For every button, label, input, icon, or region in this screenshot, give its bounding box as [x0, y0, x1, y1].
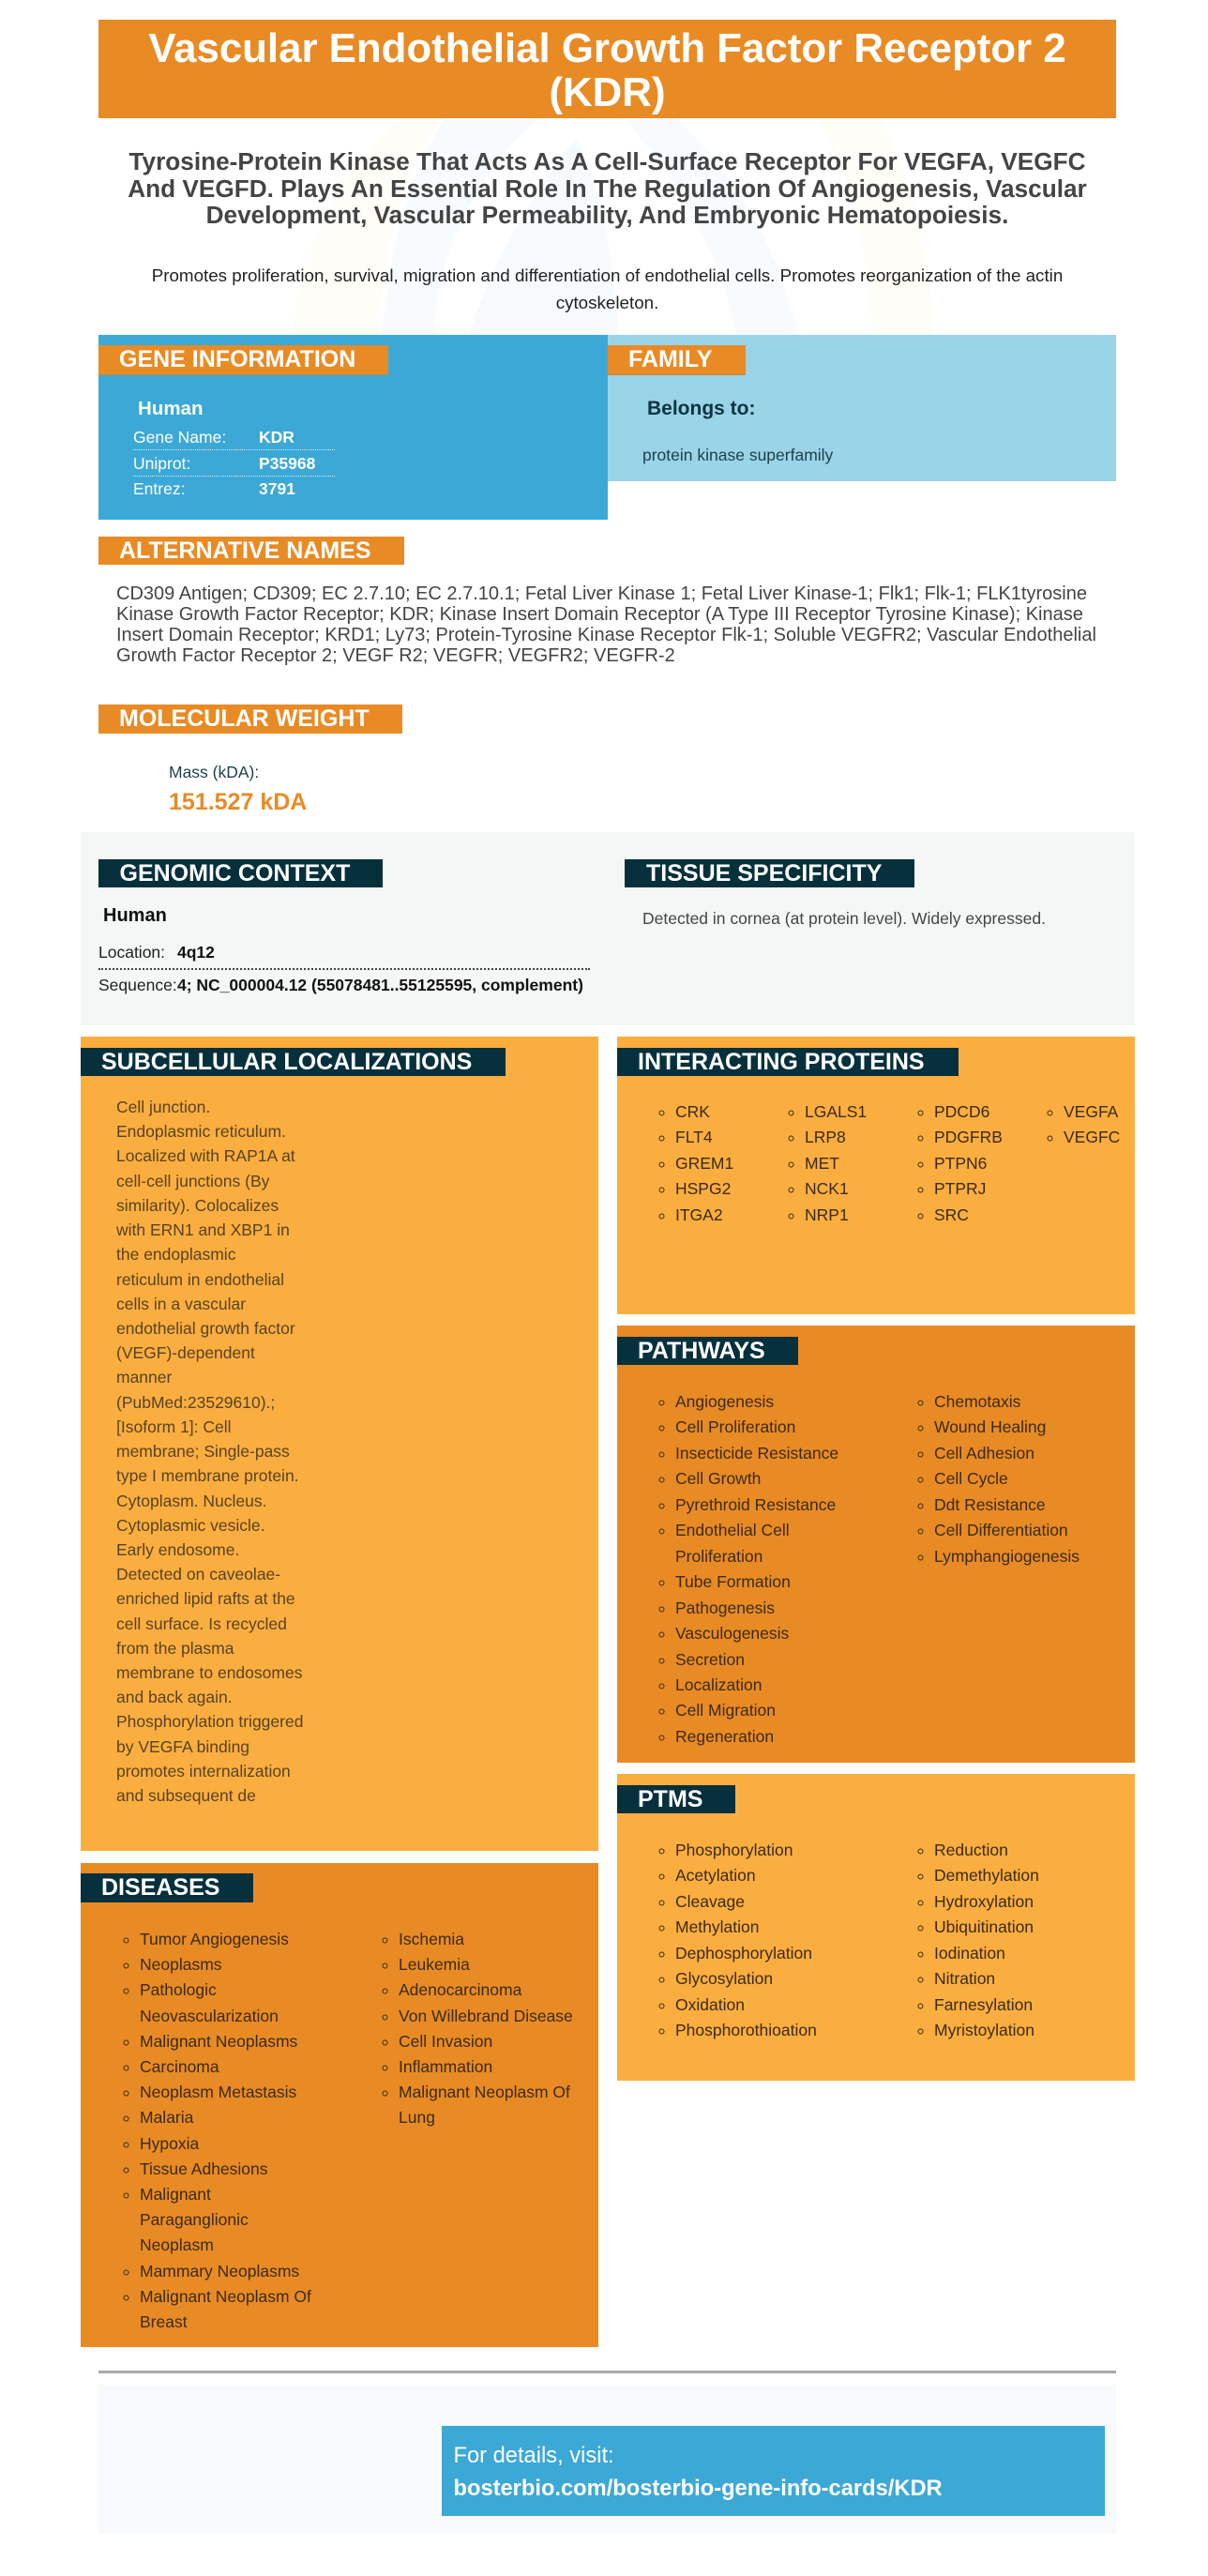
pathway list column 1: Regeneration	[675, 1727, 774, 1746]
pathway list column 1: Tube Formation	[675, 1572, 791, 1591]
pathway list column 1: Secretion	[675, 1650, 745, 1669]
tissue specificity text: Detected in cornea (at protein level). Widely expressed.	[642, 909, 1046, 928]
disease list column 2: Leukemia	[399, 1955, 470, 1974]
title	[98, 20, 1116, 118]
disease list column 1	[124, 1930, 311, 2331]
disease list column 1: Malaria	[140, 2108, 193, 2127]
description	[152, 265, 1063, 312]
pathway list column 1	[658, 1392, 838, 1746]
localization text: reticulum in endothelial	[116, 1270, 284, 1289]
localization text: Cytoplasm. Nucleus.	[116, 1492, 266, 1510]
pathway list column 1: Localization	[675, 1675, 762, 1694]
panel: ptms	[617, 1774, 1135, 2081]
pathway list column 1: Angiogenesis	[675, 1392, 774, 1411]
pathway list column 2	[917, 1392, 1080, 1566]
pathway list column 2: Ddt Resistance	[934, 1495, 1046, 1514]
localization text: Cell junction.	[116, 1098, 210, 1116]
pathway list column 1: Cell Growth	[675, 1469, 761, 1488]
protein list column 3	[917, 1102, 1003, 1224]
localization text: Endoplasmic reticulum.	[116, 1122, 286, 1141]
description: cytoskeleton.	[556, 293, 658, 312]
disease list column 2: Cell Invasion	[399, 2032, 492, 2051]
disease list column 1: Carcinoma	[140, 2057, 219, 2076]
ptm list column 2: Myristoylation	[934, 2021, 1034, 2039]
callout: details link	[442, 2426, 1105, 2516]
disease list column 2: Adenocarcinoma	[399, 1980, 521, 1999]
ptm list column 1: Phosphorothioation	[675, 2021, 817, 2039]
location row: 4q12	[177, 943, 215, 962]
title: (KDR)	[549, 69, 666, 115]
panel: diseases	[81, 1863, 598, 2347]
subtitle: Tyrosine-Protein Kinase That Acts As A Cell-Surface Receptor For VEGFA, VEGFC	[128, 147, 1086, 175]
localization text: manner	[116, 1368, 172, 1386]
localization text: membrane to endosomes	[116, 1663, 302, 1682]
ptm list column 1: Oxidation	[675, 1995, 745, 2014]
localization text: Detected on caveolae-	[116, 1565, 280, 1583]
species label: Human	[103, 905, 167, 926]
ptm list column 2: Hydroxylation	[934, 1892, 1034, 1911]
localization text: Phosphorylation triggered	[116, 1712, 303, 1731]
pathway list column 1: Insecticide Resistance	[675, 1444, 838, 1462]
protein list column 3: SRC	[934, 1205, 969, 1224]
panel: pathways	[617, 1326, 1135, 1763]
localization text: from the plasma	[116, 1639, 234, 1658]
sequence row: Sequence:	[98, 976, 177, 994]
protein list column 2: LGALS1	[805, 1102, 867, 1121]
protein list column 1: FLT4	[675, 1128, 713, 1146]
protein list column 1: CRK	[675, 1102, 710, 1121]
localization text: cells in a vascular	[116, 1295, 246, 1313]
location row: Location:	[98, 943, 165, 962]
localization text: similarity). Colocalizes	[116, 1196, 279, 1215]
pathway list column 2: Lymphangiogenesis	[934, 1547, 1080, 1566]
subtitle: And VEGFD. Plays An Essential Role In The Regulation Of Angiogenesis, Vascular	[128, 174, 1087, 203]
ptm list column 2: Farnesylation	[934, 1995, 1033, 2014]
subtitle	[128, 147, 1087, 229]
localization text: and back again.	[116, 1688, 233, 1706]
disease list column 1: Tissue Adhesions	[140, 2159, 268, 2178]
localization text: Localized with RAP1A at	[116, 1146, 295, 1165]
callout label: For details, visit:	[454, 2444, 614, 2468]
protein list column 4: VEGFA	[1064, 1102, 1118, 1121]
ptm list column 1: Glycosylation	[675, 1969, 773, 1988]
heading: diseases: DISEASES	[101, 1874, 219, 1901]
gene name row: KDR	[259, 428, 294, 447]
localization text: the endoplasmic	[116, 1245, 235, 1264]
localization text: Cytoplasmic vesicle.	[116, 1516, 265, 1535]
panel: gene information	[98, 335, 608, 520]
protein list column 4: VEGFC	[1064, 1128, 1120, 1146]
heading: family	[608, 345, 746, 374]
heading: alternative names: ALTERNATIVE NAMES	[119, 538, 371, 564]
subtitle: Development, Vascular Permeability, And Embryonic Hematopoiesis.	[206, 201, 1008, 229]
protein list column 2: LRP8	[805, 1128, 846, 1146]
ptm list column 1	[658, 1841, 817, 2039]
protein list column 4	[1047, 1102, 1120, 1146]
heading: ptms: PTMS	[638, 1786, 702, 1812]
callout url: bosterbio.com/bosterbio-gene-info-cards/KDR	[454, 2477, 943, 2501]
disease list column 1: Malignant Neoplasms	[140, 2032, 297, 2051]
panel: genomic context and tissue specificity	[81, 832, 1135, 1025]
belongs to label: Belongs to:	[647, 398, 756, 419]
species label: Human	[138, 398, 203, 419]
pathway list column 1: Cell Proliferation	[675, 1417, 795, 1436]
localization text: type I membrane protein.	[116, 1466, 299, 1485]
pathway list column 2: Cell Differentiation	[934, 1521, 1068, 1539]
heading: molecular weight: MOLECULAR WEIGHT	[119, 705, 370, 732]
mass value: 151.527 kDA	[169, 789, 307, 815]
localization text: (VEGF)-dependent	[116, 1343, 255, 1362]
heading: pathways	[617, 1337, 798, 1365]
ptm list column 1: Methylation	[675, 1917, 760, 1936]
heading: family: FAMILY	[628, 346, 712, 372]
disease list column 1: Neoplasm Metastasis	[140, 2083, 296, 2101]
disease list column 1: Pathologic Neovascularization	[140, 1980, 279, 2025]
disease list column 1: Mammary Neoplasms	[140, 2262, 299, 2281]
alternative names text: CD309 Antigen; CD309; EC 2.7.10; EC 2.7.10.1; Fetal Liver Kinase 1; Fetal Liver Kinase-1; Flk1; Flk-1; FLK1tyrosine	[116, 583, 1087, 604]
protein list column 2: NCK1	[805, 1179, 849, 1198]
alternative names text: Kinase Growth Factor Receptor; KDR; Kinase Insert Domain Receptor (A Type III Receptor Tyrosine Kinase); Kinase	[116, 604, 1083, 625]
disease list column 2: Von Willebrand Disease	[399, 2007, 573, 2025]
pathway list column 2: Wound Healing	[934, 1417, 1046, 1436]
localization text: with ERN1 and XBP1 in	[116, 1220, 290, 1239]
family text: protein kinase superfamily	[642, 446, 833, 464]
disease list column 1: Malignant Paraganglionic Neoplasm	[140, 2185, 249, 2254]
title: Vascular Endothelial Growth Factor Receptor 2	[148, 25, 1066, 71]
ptm list column 2: Demethylation	[934, 1866, 1039, 1885]
localization text: cell surface. Is recycled	[116, 1614, 287, 1633]
pathway list column 1: Vasculogenesis	[675, 1624, 789, 1643]
gene name row: Gene Name:	[133, 428, 226, 447]
disease list column 2: Malignant Neoplasm Of Lung	[399, 2083, 570, 2127]
heading: subcellular localizations: SUBCELLULAR LOCALIZATIONS	[101, 1049, 472, 1075]
localization text: [Isoform 1]: Cell	[116, 1417, 232, 1436]
footer panel	[98, 2385, 1116, 2534]
ptm list column 1: Acetylation	[675, 1866, 756, 1885]
ptm list column 2: Ubiquitination	[934, 1917, 1034, 1936]
heading: ptms	[617, 1785, 735, 1813]
protein list column 1: HSPG2	[675, 1179, 731, 1198]
alternative names text: Insert Domain Receptor; KRD1; Ly73; Protein-Tyrosine Kinase Receptor Flk-1; Soluble VEGFR2; Vascular Endothelial	[116, 625, 1096, 645]
ptm list column 2	[917, 1841, 1039, 2039]
ptm list column 1: Cleavage	[675, 1892, 745, 1911]
pathway list column 1: Endothelial Cell Proliferation	[675, 1521, 790, 1566]
pathway list column 1: Cell Migration	[675, 1701, 776, 1720]
alternative names text: Growth Factor Receptor 2; VEGF R2; VEGFR; VEGFR2; VEGFR-2	[116, 645, 675, 666]
localization text: and subsequent de	[116, 1786, 256, 1805]
localization text: endothelial growth factor	[116, 1319, 295, 1338]
protein list column 3: PTPRJ	[934, 1179, 986, 1198]
heading: interacting proteins: INTERACTING PROTEINS	[638, 1049, 925, 1075]
disease list column 1: Malignant Neoplasm Of Breast	[140, 2287, 311, 2331]
ptm list column 2: Reduction	[934, 1841, 1008, 1859]
localization text: cell-cell junctions (By	[116, 1172, 269, 1190]
localization text: membrane; Single-pass	[116, 1442, 290, 1461]
panel: interacting proteins	[617, 1037, 1135, 1314]
localization text: enriched lipid rafts at the	[116, 1589, 295, 1608]
localization text: promotes internalization	[116, 1762, 291, 1780]
pathway list column 2: Cell Adhesion	[934, 1444, 1034, 1462]
disease list column 1: Neoplasms	[140, 1955, 222, 1974]
alternative names text	[116, 583, 1096, 666]
background watermark logo	[469, 139, 619, 335]
pathway list column 2: Cell Cycle	[934, 1469, 1008, 1488]
entrez row: Entrez:	[133, 479, 185, 498]
pathway list column 2: Chemotaxis	[934, 1392, 1020, 1411]
panel: subcellular localizations	[81, 1037, 598, 1851]
protein list column 1: ITGA2	[675, 1205, 723, 1224]
pathway list column 1: Pathogenesis	[675, 1599, 775, 1617]
ptm list column 2: Iodination	[934, 1944, 1005, 1962]
entrez row	[133, 479, 295, 498]
protein list column 2	[788, 1102, 867, 1224]
ptm list column 1: Dephosphorylation	[675, 1944, 812, 1962]
ptm list column 1: Phosphorylation	[675, 1841, 793, 1859]
uniprot row: P35968	[259, 454, 315, 473]
pathway list column 1: Pyrethroid Resistance	[675, 1495, 836, 1514]
entrez row: 3791	[259, 479, 295, 498]
protein list column 2: NRP1	[805, 1205, 849, 1224]
description: Promotes proliferation, survival, migration and differentiation of endothelial cells. Promotes reorganization of the actin	[152, 265, 1063, 285]
disease list column 2: Inflammation	[399, 2057, 492, 2076]
heading: tissue specificity: TISSUE SPECIFICITY	[646, 860, 882, 886]
uniprot row: Uniprot:	[133, 454, 190, 473]
localization text	[116, 1098, 303, 1805]
panel: genomic context and tissue specificity: 4; NC_000004.12 (55078481..55125595, complement)	[177, 976, 583, 994]
protein list column 3: PDCD6	[934, 1102, 989, 1121]
protein list column 2: MET	[805, 1154, 839, 1173]
protein list column 3: PDGFRB	[934, 1128, 1003, 1146]
sequence row	[98, 976, 583, 994]
heading: pathways: PATHWAYS	[638, 1338, 765, 1364]
disease list column 1: Tumor Angiogenesis	[140, 1930, 289, 1948]
protein list column 3: PTPN6	[934, 1154, 987, 1173]
disease list column 2	[383, 1930, 573, 2127]
protein list column 1	[658, 1102, 733, 1224]
heading: gene information: GENE INFORMATION	[119, 346, 355, 372]
uniprot row	[133, 454, 335, 477]
protein list column 1: GREM1	[675, 1154, 733, 1173]
gene name row	[133, 428, 335, 450]
mass label: Mass (kDA):	[169, 763, 259, 781]
location row	[98, 943, 590, 970]
ptm list column 2: Nitration	[934, 1969, 995, 1988]
heading: diseases	[81, 1873, 253, 1902]
localization text: (PubMed:23529610).;	[116, 1393, 275, 1412]
panel: family	[608, 335, 1116, 481]
disease list column 1: Hypoxia	[140, 2134, 199, 2153]
heading: genomic context: GENOMIC CONTEXT	[120, 860, 350, 886]
disease list column 2: Ischemia	[399, 1930, 464, 1948]
localization text: by VEGFA binding	[116, 1737, 249, 1756]
localization text: Early endosome.	[116, 1540, 239, 1559]
